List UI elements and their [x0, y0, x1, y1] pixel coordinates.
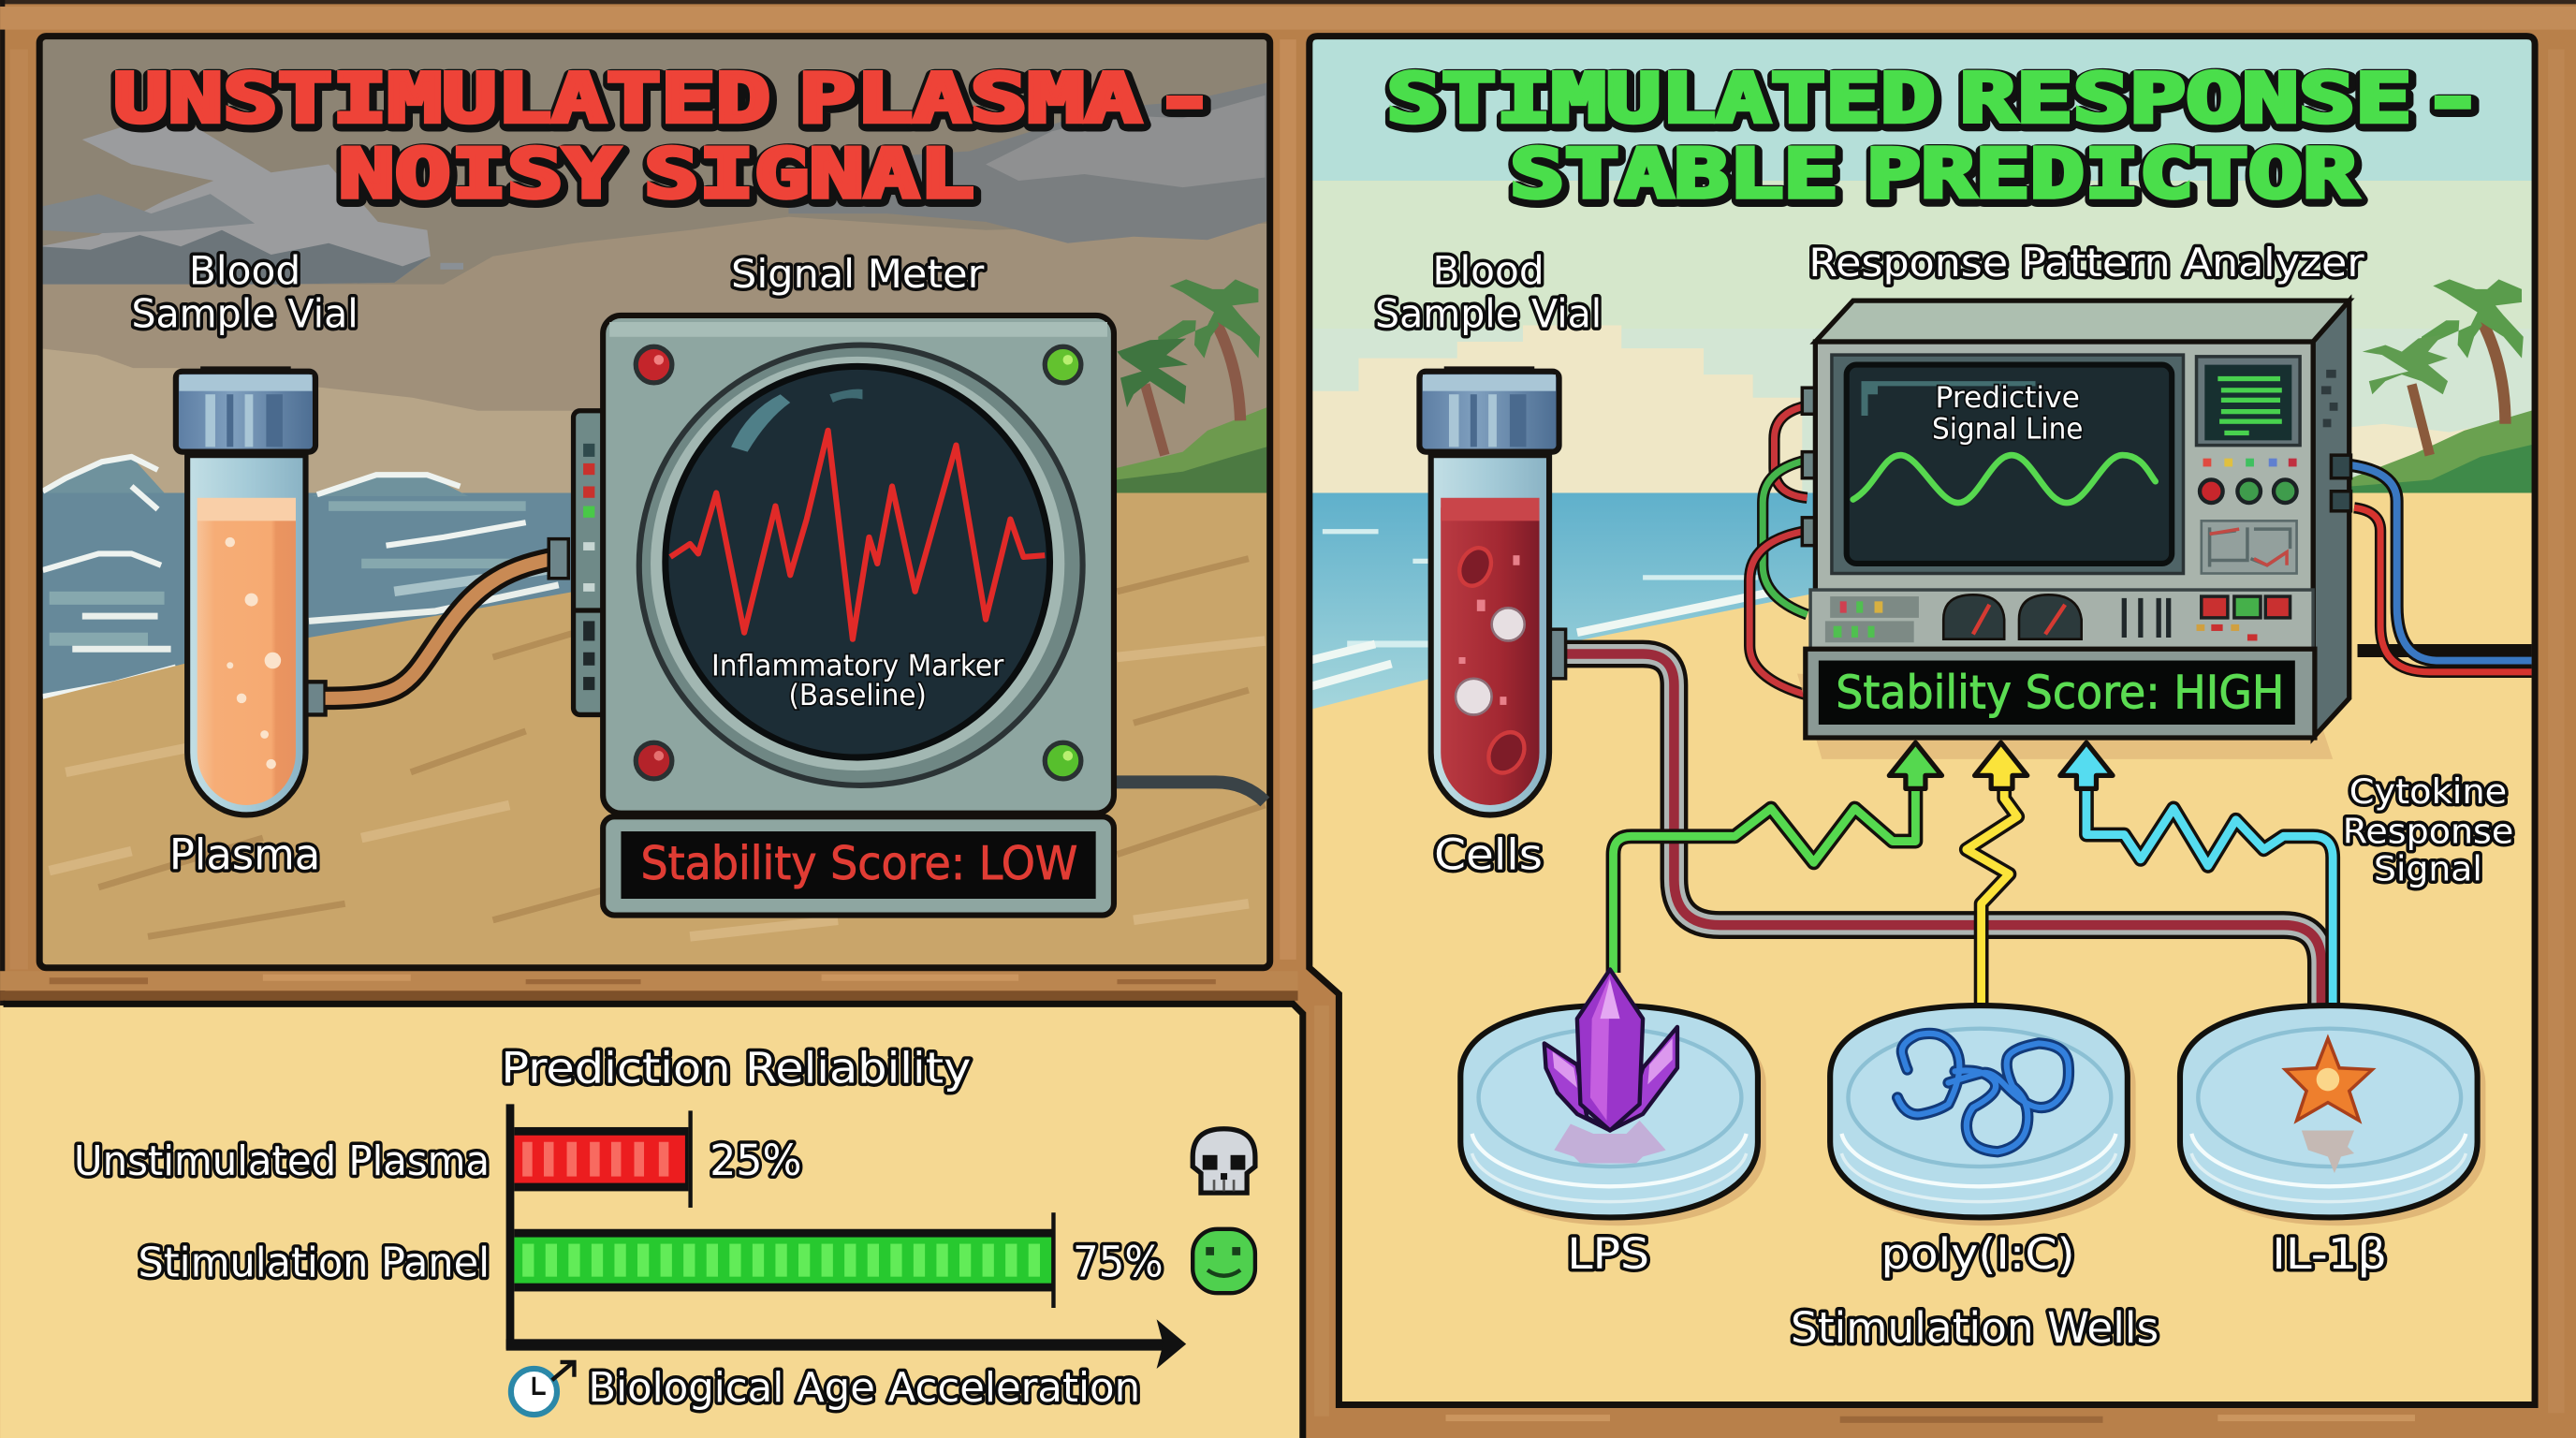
labels: bars: 25%	[710, 1136, 802, 1185]
label: inflammatory marker: Inflammatory Marker	[711, 649, 1004, 682]
labels: bars: Unstimulated Plasma	[74, 1137, 490, 1185]
icon: blood cell vial	[1419, 366, 1566, 814]
labels: stimulants: IL-1β	[2272, 1229, 2387, 1279]
icon: smiley	[1193, 1229, 1255, 1293]
chart title: Prediction Reliability	[501, 1044, 971, 1093]
mini terminal	[2197, 357, 2300, 446]
panel border	[1310, 37, 2535, 1405]
title: unstimulated plasma: PLASMA	[798, 59, 1142, 138]
indicator lights	[636, 346, 1081, 779]
labels: bars	[74, 1136, 1164, 1287]
label: biological age acceleration: Biological Age Acceleration	[588, 1364, 1140, 1412]
label: predictive signal line: Predictive	[1935, 381, 2080, 415]
title: unstimulated plasma: PLASMA	[800, 62, 1144, 140]
arrow: cyan IL-1β signal	[2060, 742, 2333, 1005]
label: blood sample vial	[131, 248, 359, 336]
label: blood sample vial: Blood	[1432, 248, 1544, 294]
panel border	[39, 37, 1270, 968]
title: unstimulated plasma: SIGNAL	[646, 138, 976, 216]
cable: meter power	[1114, 782, 1265, 801]
panel: prediction reliability chart	[0, 1004, 1303, 1438]
well: poly(I:C)	[1830, 1005, 2136, 1225]
status: stability score high: Stability Score: HIGH	[1836, 665, 2284, 719]
arrow: green LPS signal	[1613, 742, 1942, 973]
label: stimulation wells: Stimulation Wells	[1791, 1303, 2159, 1353]
icon: skull	[1193, 1129, 1255, 1193]
title: unstimulated plasma: -	[1157, 62, 1216, 140]
palms and hill	[1116, 279, 1266, 493]
title: stimulated response: -	[2424, 62, 2484, 140]
title: unstimulated plasma	[113, 59, 1216, 216]
title: stimulated response: STIMULATED	[1388, 62, 1937, 140]
label: signal meter: Signal Meter	[731, 251, 985, 297]
icon: purple crystal	[1544, 969, 1677, 1130]
title: unstimulated plasma: UNSTIMULATED	[113, 59, 770, 138]
icon: blue RNA coil	[1897, 1034, 2069, 1152]
label: inflammatory marker	[711, 649, 1004, 712]
panel border	[4, 1004, 1303, 1438]
bar: stimulation panel	[514, 1212, 1056, 1308]
title: unstimulated plasma: UNSTIMULATED	[115, 62, 772, 140]
bar: unstimulated plasma	[514, 1110, 693, 1208]
label: predictive signal line	[1932, 381, 2083, 447]
label: cytokine response signal: Response	[2343, 811, 2513, 851]
chart: noisy waveform	[670, 431, 1045, 639]
title: stimulated response: STABLE	[1512, 138, 1840, 216]
title: stimulated response: RESPONSE	[1962, 62, 2413, 140]
clouds	[39, 82, 1270, 285]
label: blood sample vial: Blood	[189, 248, 300, 294]
panel background: stormy beach	[39, 37, 1270, 968]
panel: unstimulated plasma	[39, 37, 1270, 968]
title: unstimulated plasma: NOISY	[340, 138, 622, 216]
icon: plasma vial	[176, 366, 326, 814]
labels: bars: Stimulation Panel	[138, 1240, 490, 1287]
label: blood sample vial: Sample Vial	[131, 290, 359, 336]
label: inflammatory marker: (Baseline)	[788, 679, 927, 712]
title: stimulated response	[1386, 59, 2484, 216]
title: stimulated response: PREDICTOR	[1866, 135, 2358, 213]
panel: stimulated response	[1310, 37, 2537, 1405]
labels: stimulants: LPS	[1567, 1229, 1649, 1279]
sea	[39, 457, 581, 714]
cable: vial to meter	[326, 557, 562, 698]
icon: orange star	[2285, 1038, 2372, 1121]
title: stimulated response: PREDICTOR	[1868, 138, 2360, 216]
label: cells: Cells	[1434, 829, 1543, 879]
labels: stimulants: poly(I:C)	[1881, 1229, 2075, 1279]
well: LPS	[1460, 969, 1766, 1225]
title: stimulated response: STABLE	[1510, 135, 1838, 213]
title: unstimulated plasma: -	[1155, 59, 1214, 138]
label: cytokine response signal: Cytokine	[2349, 771, 2507, 812]
labels: stimulants	[1567, 1229, 2387, 1279]
title: stimulated response: -	[2423, 59, 2482, 138]
palms and hill	[2351, 279, 2537, 493]
label: cytokine response signal: Signal	[2374, 849, 2482, 889]
label: response pattern analyzer: Response Pattern Analyzer	[1808, 240, 2364, 286]
icon: signal meter	[549, 315, 1114, 814]
title: stimulated response: RESPONSE	[1960, 59, 2411, 138]
status: stability score low	[603, 816, 1114, 916]
cables: analyzer connections	[1749, 405, 2532, 695]
gauges and sliders	[1810, 590, 2313, 649]
icon: clock with arrow	[511, 1362, 574, 1415]
chart axes	[506, 1104, 1186, 1369]
control lights and knobs	[2200, 459, 2297, 574]
title: unstimulated plasma: SIGNAL	[644, 135, 974, 213]
title: unstimulated plasma: NOISY	[339, 135, 621, 213]
sand	[39, 493, 1270, 968]
label: cytokine response signal	[2343, 771, 2513, 889]
label: blood sample vial: Sample Vial	[1375, 290, 1602, 336]
status: stability score low: Stability Score: LOW	[641, 836, 1077, 890]
icon: response pattern analyzer	[1797, 301, 2351, 759]
arrow: yellow poly(I:C) signal	[1967, 742, 2027, 1005]
label: blood sample vial	[1375, 248, 1602, 336]
cable: blood cell tube	[1560, 654, 2321, 1009]
label: plasma: Plasma	[169, 829, 320, 879]
status: stability score high	[1806, 649, 2315, 738]
well: IL-1β	[2180, 1005, 2485, 1225]
panel background: sunny beach	[1310, 37, 2537, 1405]
title: stimulated response: STIMULATED	[1386, 59, 1935, 138]
labels: bars: 75%	[1073, 1238, 1164, 1287]
panel background	[0, 1005, 1303, 1438]
chart: stable sine wave	[1853, 455, 2156, 503]
label: predictive signal line: Signal Line	[1932, 413, 2083, 447]
